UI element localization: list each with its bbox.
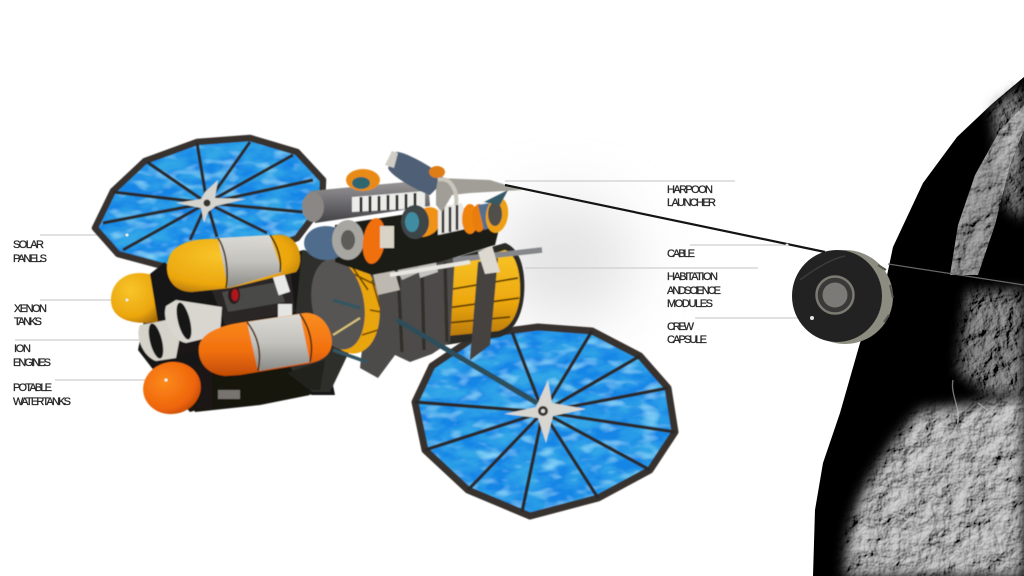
labels: right [667, 184, 721, 346]
label: harpoon launcher: HARPOON [667, 184, 713, 196]
label: harpoon launcher [667, 184, 716, 209]
struts and mast [372, 246, 542, 403]
grey cylinder with windows [302, 180, 430, 223]
label: ion engines [13, 343, 51, 369]
dark backing structure behind tanks [138, 250, 335, 412]
label: ion engines: ION [14, 343, 31, 355]
label: cable: CABLE [667, 248, 695, 260]
ion engines [138, 300, 222, 361]
xenon tank: large yellow [167, 235, 300, 292]
upper dark bay [304, 205, 505, 275]
label: crew capsule: CREW [667, 321, 695, 333]
label: harpoon launcher: LAUNCHER [667, 197, 716, 209]
engine rings [346, 169, 510, 239]
spacecraft [111, 151, 542, 419]
label: solar panels: SOLAR [13, 239, 44, 251]
label: xenon tanks: TANKS [14, 316, 42, 328]
label: xenon tanks [14, 303, 47, 328]
label: xenon tanks: XENON [14, 303, 47, 315]
marker dots [125, 233, 814, 382]
label: habitation and science modules: ANDSCIENCE [667, 285, 721, 297]
asteroid [813, 77, 1024, 576]
label: potable water tanks: WATERTANKS [13, 396, 71, 408]
label: potable water tanks [13, 382, 71, 408]
potable water tank: large orange [199, 313, 332, 390]
label: solar panels: PANELS [13, 253, 47, 265]
xenon tank: small yellow [111, 262, 180, 323]
label: crew capsule: CAPSULE [667, 334, 707, 346]
solar panel: lower right [415, 327, 675, 516]
solar panel: upper left [95, 138, 323, 268]
label: habitation and science modules: MODULES [667, 298, 713, 310]
yellow ring module [304, 249, 387, 362]
label: habitation and science modules: HABITATION [667, 271, 718, 283]
label: solar panels [13, 239, 47, 265]
label: potable water tanks: POTABLE [13, 382, 52, 394]
cable [505, 185, 1024, 285]
grey bellows section [290, 250, 455, 392]
harpoon launcher [436, 178, 522, 212]
crew capsule [792, 250, 893, 344]
label: habitation and science modules [667, 271, 721, 310]
leader lines [15, 181, 812, 380]
blue-grey tank [385, 151, 445, 195]
dark mount with red sensor [210, 268, 295, 325]
soft shadow behind spacecraft [495, 198, 635, 322]
potable water tank: lower orange [138, 357, 310, 419]
label: crew capsule [667, 321, 707, 346]
labels: left [13, 239, 71, 408]
label: ion engines: ENGINES [13, 357, 51, 369]
rear yellow habitation module [440, 243, 524, 360]
